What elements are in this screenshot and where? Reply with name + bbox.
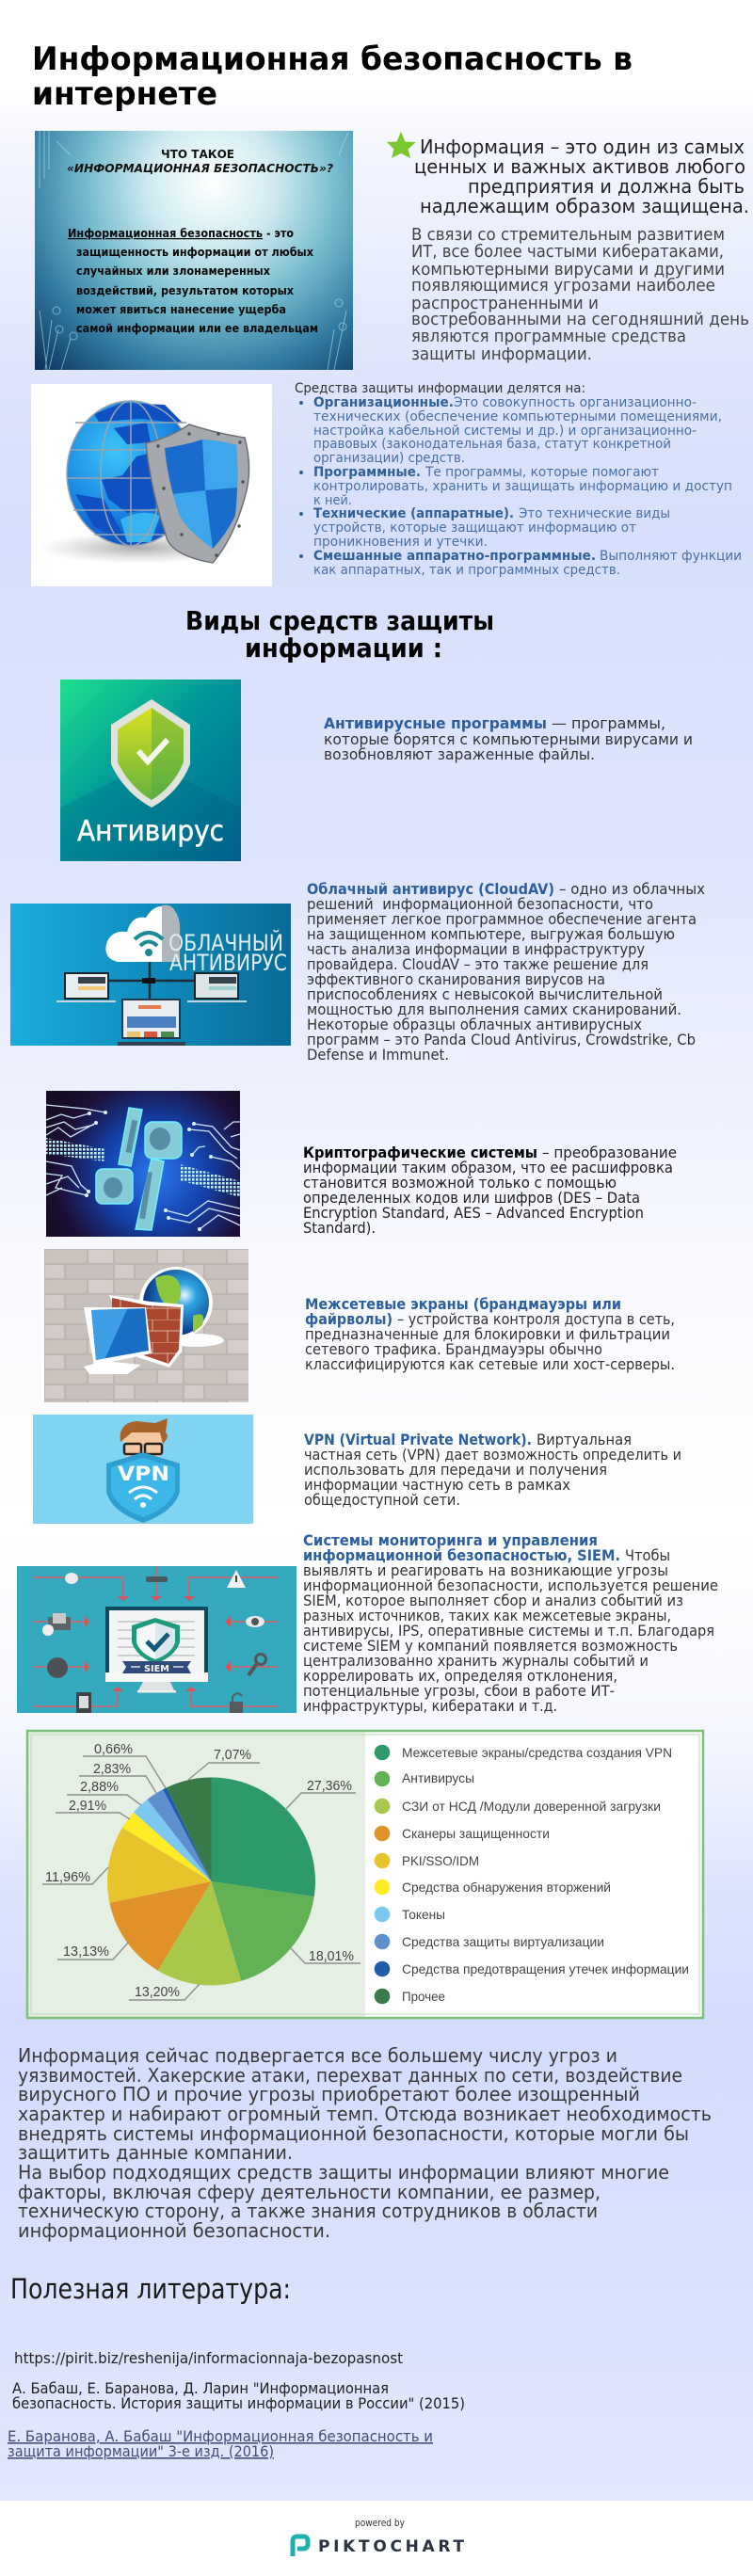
pie value labels: 11,96% bbox=[45, 1870, 90, 1885]
list item: organizational bbox=[299, 395, 722, 466]
chart legend: Средства обнаружения вторжений bbox=[402, 1880, 611, 1895]
pie value labels: 18,01% bbox=[309, 1949, 354, 1964]
list item: mixed: Выполняют функции bbox=[600, 549, 742, 564]
text block: SIEM: информационной безопасностью, SIEM. bbox=[303, 1546, 620, 1564]
list item: hardware bbox=[299, 506, 670, 550]
text block: SIEM bbox=[303, 1531, 718, 1715]
text block: threats and choosing protection: факторы, включая сферу деятельности компании, ее размер, bbox=[18, 2181, 601, 2203]
image: what is information security slide: может явиться нанесение ущерба bbox=[76, 302, 286, 316]
text block: firewalls: классифицируются как сетевые или хост-серверы. bbox=[305, 1355, 675, 1373]
chart legend: PKI/SSO/IDM bbox=[402, 1853, 479, 1868]
text block: cloud antivirus: на защищенном компьютере, выгружая большую bbox=[307, 925, 675, 943]
list item: software: Программные. bbox=[313, 465, 421, 480]
chart legend: Средства защиты виртуализации bbox=[402, 1934, 604, 1949]
text block: threats and choosing protection: защитить данные компании. bbox=[18, 2141, 293, 2164]
text block: antivirus programs: — программы, bbox=[552, 714, 665, 732]
text block: threats and choosing protection: техническую сторону, а также знания сотрудников в области bbox=[18, 2200, 598, 2222]
image: what is information security slide: Информационная безопасность bbox=[68, 226, 263, 240]
text block: VPN: использовать для передачи и получения bbox=[304, 1461, 607, 1479]
text block: software protection in demand: появляющимися угрозами наиболее bbox=[411, 276, 715, 296]
image: what is information security slide: ЧТО ТАКОЕ bbox=[161, 148, 234, 161]
text block: VPN: частная сеть (VPN) дает возможность определить и bbox=[304, 1446, 681, 1464]
text block: SIEM: коррелировать их, определяя отклонения, bbox=[303, 1667, 617, 1685]
image: what is information security slide: самой информации или ее владельцам bbox=[76, 321, 318, 335]
image: firewall bbox=[44, 1249, 248, 1402]
list item: organizational: Организационные. bbox=[313, 395, 454, 410]
text block: antivirus programs: которые борятся с компьютерными вирусами и bbox=[324, 730, 693, 748]
text block: cloud antivirus: эффективного сканирования вирусов на bbox=[307, 970, 605, 988]
pie value labels: 13,13% bbox=[63, 1944, 109, 1960]
text block: threats and choosing protection: вирусного ПО и прочие угрозы приобретают более изощренный bbox=[18, 2083, 640, 2105]
pie value labels: 27,36% bbox=[307, 1779, 352, 1794]
pie value labels: 2,91% bbox=[69, 1799, 106, 1814]
text block: software protection in demand bbox=[411, 225, 749, 364]
text block: cryptographic systems: Encryption Standard, AES – Advanced Encryption bbox=[303, 1204, 644, 1222]
text block: SIEM: информационной безопасности, используется решение bbox=[303, 1576, 718, 1594]
text block: firewalls: предназначенные для блокировки и фильтрации bbox=[305, 1325, 670, 1343]
text block: cryptographic systems: Криптографические системы bbox=[303, 1144, 537, 1161]
text block: cryptographic systems: определенных кодов или шифров (DES – Data bbox=[303, 1189, 640, 1207]
list item: mixed: как аппаратных, так и программных средств. bbox=[313, 563, 620, 578]
list item: organizational: технических (обеспечение компьютерными помещениями, bbox=[313, 409, 722, 424]
text block: cryptographic systems bbox=[303, 1144, 677, 1237]
chart legend: Сканеры защищенности bbox=[402, 1826, 550, 1841]
text block: antivirus programs: Антивирусные программы bbox=[324, 714, 547, 732]
text block: antivirus programs bbox=[324, 714, 693, 763]
text block: firewalls bbox=[305, 1295, 675, 1373]
image: SIEM: SIEM bbox=[144, 1664, 169, 1674]
text block: cloud antivirus: применяет легкое программное обеспечение агента bbox=[307, 910, 697, 928]
text block: SIEM: Чтобы bbox=[625, 1546, 670, 1564]
text block: cloud antivirus: часть анализа информации в инфраструктуру bbox=[307, 940, 645, 958]
list item: software: контролировать, хранить и защищать информацию и доступ bbox=[313, 479, 732, 494]
text block: references: защита информации" 3-е изд. (2016) bbox=[8, 2442, 274, 2460]
list item: organizational: правовых (законодательная база, статут конкретной bbox=[313, 437, 671, 452]
footer: powered by Piktochart: powered by bbox=[355, 2517, 405, 2529]
text block: software protection in demand: компьютерными вирусами и другими bbox=[411, 260, 725, 280]
heading: kinds of protection: информации : bbox=[245, 632, 442, 664]
text block: software protection in demand: защиты информации. bbox=[411, 344, 592, 364]
chart legend: Межсетевые экраны/средства создания VPN bbox=[402, 1745, 672, 1760]
text block: information as an asset: Информация – это один из самых bbox=[420, 136, 745, 158]
text block: types of protection list: Средства защиты информации делятся на: bbox=[295, 381, 585, 396]
chart legend: Прочее bbox=[402, 1989, 445, 2004]
text block: VPN bbox=[304, 1431, 681, 1509]
text block: VPN: Виртуальная bbox=[537, 1431, 632, 1448]
text block: references: https://pirit.biz/reshenija/informacionnaja-bezopasnost bbox=[14, 2349, 403, 2367]
text block: software protection in demand: распространенными и bbox=[411, 294, 599, 313]
heading: kinds of protection bbox=[185, 605, 494, 664]
text block: types of protection list bbox=[295, 381, 742, 578]
text block: SIEM: разных источников, таких как межсетевые экраны, bbox=[303, 1607, 671, 1624]
icon: green star bbox=[387, 132, 416, 158]
pie value labels bbox=[42, 1742, 360, 2000]
image: cloud antivirus: АНТИВИРУС bbox=[169, 950, 287, 976]
text block: cryptographic systems: Standard). bbox=[303, 1219, 376, 1237]
text block: information as an asset: предприятия и должна быть bbox=[468, 175, 745, 198]
list item: organizational: Это совокупность организационно- bbox=[454, 395, 697, 410]
list item: hardware: Технические (аппаратные). bbox=[313, 506, 514, 521]
text block: threats and choosing protection: информационной безопасности. bbox=[18, 2219, 330, 2242]
image: antivirus bbox=[60, 680, 241, 861]
footer: powered by Piktochart: PIKTOCHART bbox=[318, 2537, 464, 2556]
list item: hardware: Это технические виды bbox=[519, 506, 670, 521]
image: what is information security slide: защищенность информации от любых bbox=[76, 245, 313, 259]
list item: hardware: проникновения и утечки. bbox=[313, 535, 488, 550]
list item: software bbox=[299, 465, 732, 508]
text block: cloud antivirus: программ – это Panda Cloud Antivirus, Crowdstrike, Cb bbox=[307, 1031, 696, 1048]
icon: Piktochart logo bbox=[293, 2536, 308, 2556]
chart legend: Средства предотвращения утечек информации bbox=[402, 1961, 689, 1976]
pie chart bbox=[107, 1777, 315, 1985]
list item: software: Те программы, которые помогают bbox=[425, 465, 660, 480]
text block: cryptographic systems: информации таким образом, что ее расшифровка bbox=[303, 1159, 673, 1176]
text block: cloud antivirus: Defense и Immunet. bbox=[307, 1046, 449, 1064]
text block: cloud antivirus: провайдера. CloudAV – это также решение для bbox=[307, 955, 649, 973]
pie value labels: 2,83% bbox=[93, 1762, 131, 1777]
pie value labels: 2,88% bbox=[80, 1780, 119, 1795]
text block: cryptographic systems: становится возможной только с помощью bbox=[303, 1174, 617, 1192]
text block: firewalls: Межсетевые экраны (брандмауэры или bbox=[305, 1295, 621, 1313]
text block: cloud antivirus: Облачный антивирус (CloudAV) bbox=[307, 880, 554, 898]
text block: firewalls: сетевого трафика. Брандмауэры обычно bbox=[305, 1340, 602, 1358]
list item: hardware: устройств, которые защищают информацию от bbox=[313, 520, 637, 536]
text block: information as an asset bbox=[414, 136, 749, 217]
image: what is information security slide: - это bbox=[266, 226, 294, 240]
text block: references: Е. Баранова, А. Бабаш "Информационная безопасность и bbox=[8, 2427, 433, 2445]
chart legend: Токены bbox=[402, 1907, 445, 1922]
chart legend bbox=[375, 1745, 689, 2004]
pie value labels: 7,07% bbox=[214, 1748, 251, 1763]
text block: software protection in demand: являются программные средства bbox=[411, 327, 686, 346]
chart legend: Антивирусы bbox=[402, 1770, 474, 1785]
text block: threats and choosing protection: характер и набирают огромный темп. Отсюда возникает необходимость bbox=[18, 2103, 712, 2125]
pie value labels: 0,66% bbox=[94, 1742, 133, 1757]
text block: cloud antivirus: Некоторые образцы облачных антивирусных bbox=[307, 1016, 642, 1033]
text block: references: безопасность. История защиты информации в России" (2015) bbox=[12, 2394, 465, 2412]
text block: cloud antivirus: решений информационной безопасности, что bbox=[307, 895, 653, 913]
heading: useful literature: Полезная литература: bbox=[10, 2273, 291, 2305]
list item: organizational: организации) средств. bbox=[313, 451, 465, 466]
image: cryptographic keys bbox=[46, 1091, 240, 1237]
image: VPN: VPN bbox=[118, 1463, 169, 1485]
text block: firewalls: – устройства контроля доступа в сеть, bbox=[397, 1310, 675, 1328]
text block: threats and choosing protection: внедрять системы информационной безопасности, которые могли бы bbox=[18, 2122, 689, 2145]
image: what is information security slide bbox=[35, 131, 353, 370]
footer: powered by Piktochart bbox=[293, 2517, 464, 2556]
text block: SIEM: Системы мониторинга и управления bbox=[303, 1531, 598, 1549]
text block: VPN: VPN (Virtual Private Network). bbox=[304, 1431, 532, 1448]
text block: references bbox=[8, 2349, 465, 2460]
text block: threats and choosing protection: Информация сейчас подвергается все большему числу угроз и bbox=[18, 2044, 617, 2067]
image: what is information security slide: случайных или злонамеренных bbox=[76, 264, 270, 278]
image: cloud antivirus bbox=[10, 904, 291, 1046]
list item: software: к ней. bbox=[313, 493, 352, 508]
image: what is information security slide: «ИНФОРМАЦИОННАЯ БЕЗОПАСНОСТЬ»? bbox=[67, 162, 333, 175]
text block: software protection in demand: ИТ, все более частыми кибератаками, bbox=[411, 242, 724, 262]
text block: cryptographic systems: – преобразование bbox=[542, 1144, 677, 1161]
text block: cloud antivirus: приспособлениях с невысокой вычислительной bbox=[307, 985, 663, 1003]
title bbox=[32, 40, 633, 113]
text block: cloud antivirus: мощностью для выполнения самих сканирований. bbox=[307, 1000, 681, 1018]
image: cloud antivirus: ОБЛАЧНЫЙ bbox=[168, 929, 283, 956]
text block: SIEM: SIEM, которое выполняет сбор и анализ событий из bbox=[303, 1592, 683, 1609]
image: SIEM bbox=[17, 1566, 296, 1713]
text block: threats and choosing protection: уязвимостей. Хакерские атаки, перехват данных по сети, воздействие bbox=[18, 2064, 682, 2087]
text block: VPN: информации частную сеть в рамках bbox=[304, 1476, 570, 1494]
text block: SIEM: централизованно хранить журналы событий и bbox=[303, 1652, 649, 1670]
text block: references: А. Бабаш, Е. Баранова, Д. Ларин "Информационная bbox=[12, 2379, 389, 2397]
list item: mixed: Смешанные аппаратно-программные. bbox=[313, 549, 596, 564]
text block: threats and choosing protection: На выбор подходящих средств защиты информации влияют многие bbox=[18, 2161, 669, 2184]
chart panel: security market shares bbox=[26, 1730, 704, 2019]
heading: kinds of protection: Виды средств защиты bbox=[185, 605, 494, 636]
text block: information as an asset: надлежащим образом защищена. bbox=[420, 195, 749, 217]
title: Информационная безопасность в bbox=[32, 40, 633, 78]
text block: threats and choosing protection bbox=[18, 2044, 712, 2242]
title: интернете bbox=[32, 75, 217, 113]
text block: SIEM: выявлять и реагировать на возникающие угрозы bbox=[303, 1561, 668, 1579]
text block: SIEM: инфраструктуры, кибератаки и т.д. bbox=[303, 1697, 557, 1715]
image: VPN bbox=[33, 1415, 253, 1524]
text block: SIEM: антивирусы, IPS, оперативные системы и т.п. Благодаря bbox=[303, 1622, 714, 1640]
text block: software protection in demand: В связи со стремительным развитием bbox=[411, 225, 725, 245]
text block: VPN: общедоступной сети. bbox=[304, 1491, 460, 1509]
list item: mixed bbox=[299, 549, 742, 578]
text block: antivirus programs: возобновляют зараженные файлы. bbox=[324, 745, 595, 763]
image: antivirus: Антивирус bbox=[77, 815, 224, 848]
text block: firewalls: файрволы) bbox=[305, 1310, 393, 1328]
text block: SIEM: потенциальные угрозы, сбои в работе ИТ- bbox=[303, 1682, 615, 1700]
pie value labels: 13,20% bbox=[135, 1985, 180, 2000]
list item: organizational: настройка кабельной системы и др.) и организационно- bbox=[313, 424, 697, 439]
text block: cloud antivirus bbox=[307, 880, 705, 1064]
image: what is information security slide: воздействий, результатом которых bbox=[76, 283, 294, 297]
chart legend: СЗИ от НСД /Модули доверенной загрузки bbox=[402, 1799, 661, 1814]
text block: cloud antivirus: – одно из облачных bbox=[559, 880, 705, 898]
text block: information as an asset: ценных и важных активов любого bbox=[414, 155, 745, 178]
image: globe and shield bbox=[31, 384, 272, 586]
footer band bbox=[0, 2501, 753, 2576]
text block: SIEM: системе SIEM у компаний появляется возможность bbox=[303, 1637, 678, 1655]
